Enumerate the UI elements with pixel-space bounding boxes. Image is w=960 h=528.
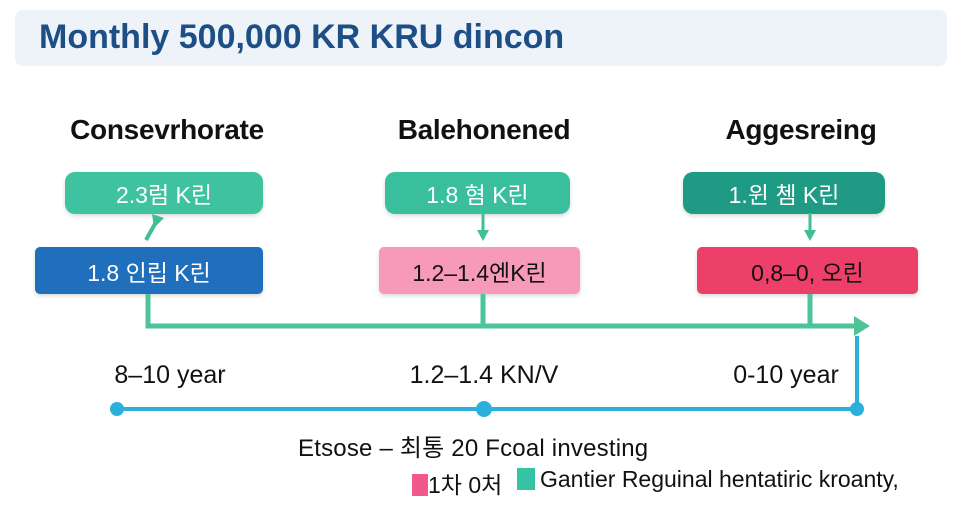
legend item: teal: Gantier Reguinal hentatiric kroanty, [540,466,899,492]
box: aggressive [697,247,918,294]
pill: aggressive top: 1.윈 쳄 K린 [729,182,839,208]
pill: balanced top [385,172,570,214]
heading: balanced: Balehonened [398,114,570,145]
box: conservative [35,247,263,294]
green flow line [148,294,870,336]
title bar [15,10,947,66]
legend item: pink: 1차 0처 [428,472,502,498]
year label: conservative: 8–10 year [114,361,226,389]
footnote: Etsose – 최통 20 Fcoal investing [298,435,648,462]
heading: aggressive: Aggesreing [725,114,877,145]
pill: conservative top [65,172,263,214]
blue timeline [110,336,864,417]
box: aggressive: 0,8–0, 오린 [751,260,864,286]
pill: balanced top: 1.8 혐 K린 [426,182,529,208]
legend [412,466,899,498]
pill: aggressive top [683,172,885,214]
arrow: conservative up [146,214,164,240]
box: conservative: 1.8 인립 K린 [87,260,211,286]
arrow: aggressive down [804,213,816,241]
year label: balanced: 1.2–1.4 KN/V [410,361,558,389]
pill: conservative top: 2.3럼 K린 [116,182,212,208]
box: balanced [379,247,580,294]
title: Monthly 500,000 KR KRU dincon [39,18,564,56]
box: balanced: 1.2–1.4엔K린 [412,260,547,286]
heading: conservative: Consevrhorate [70,114,264,145]
year label: aggressive: 0-10 year [733,361,839,389]
arrow: balanced down [477,213,489,241]
